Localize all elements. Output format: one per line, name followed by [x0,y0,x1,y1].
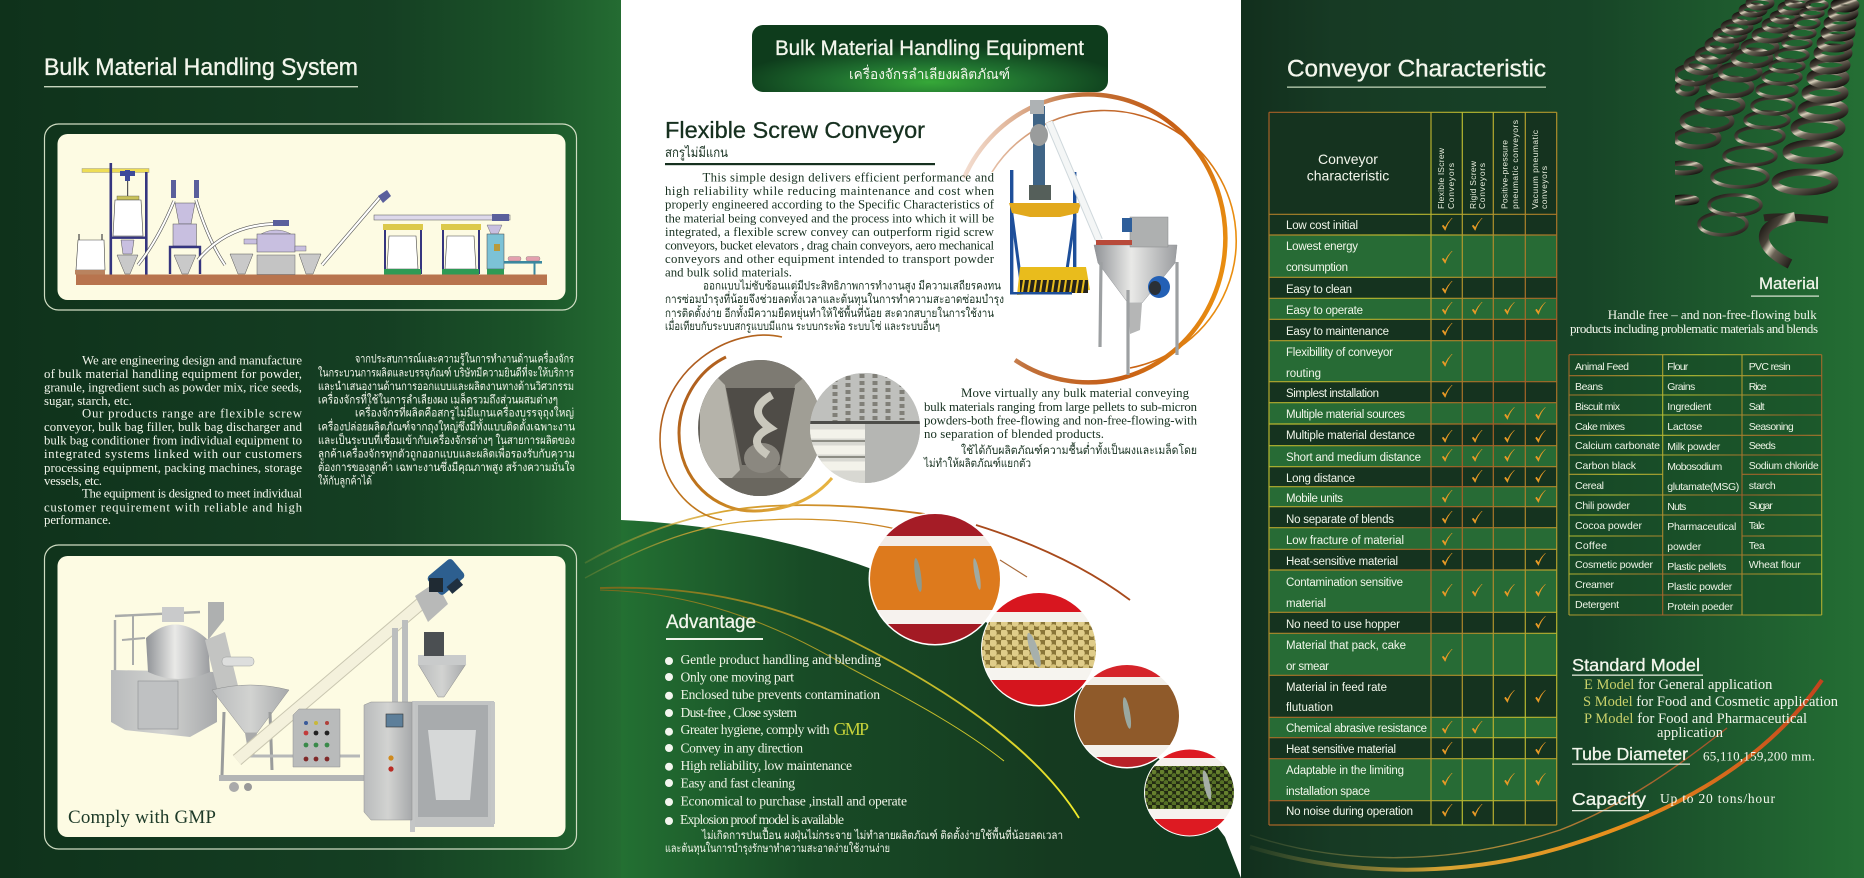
table header: Conveyors [1446,163,1456,209]
row: mobile units: Mobile units [1286,493,1343,505]
photo: flexible screw conveyor with bag unloader and hopper [1009,100,1177,375]
row: multiple material destance [1269,424,1557,446]
row: long distance [1269,467,1557,487]
diagram: bulk bag unloading frame [75,163,149,274]
text block: thai material range: ใช้ได้กับผลิตภัณฑ์ความชื้นต่ำทั้งเป็นผงและเมล็ดโดย [961,442,1197,457]
row: easy to maintenance: Easy to maintenance [1286,326,1389,338]
column: A to D materials: Beans [1575,381,1603,393]
heading: material: Material [1759,274,1819,293]
section: capacity: Capacity [1572,789,1646,809]
list: advantages: Economical to purchase ,install and operate [680,794,907,809]
text block: thai company description: ในกระบวนการผลิตและบรรจุภัณฑ์ บริษัทมีความยินดีที่จะให้บริการ [318,364,574,379]
row: no noise during operation [1269,801,1557,825]
row: no separate of blends [1269,507,1557,528]
heading: conveyor characteristic: Conveyor Characteristic [1287,56,1546,83]
column: P to W materials: Sugar [1749,500,1773,512]
text block: english company description: bulk bag conditioner from individual equipment to [44,434,302,448]
text block: english company description: The equipment is designed to meet individual [82,487,302,501]
text block: thai conveyor description: การติดตั้งง่าย อีกทั้งมีความยืดหยุ่นทำให้ใช้พื้นที่น้อย สะดวกสบายในการใช้งาน [665,305,994,320]
photo: stainless hopper [1094,217,1177,375]
row: lowest energy consumption: consumption [1286,262,1348,274]
text block: english conveyor description: This simple design delivers efficient performance and [702,171,995,185]
heading: flexible screw conveyor: Flexible Screw Conveyor [665,117,925,143]
column: P to W materials: Wheat flour [1749,559,1801,571]
text block: english company description: processing equipment, packing machines, storage [44,461,302,475]
list: advantages: High reliability, low maintenance [680,758,852,773]
column: F to P materials: Milk powder [1667,441,1721,453]
text block: english material range [924,386,1198,441]
row: multiple material destance: Multiple material destance [1286,430,1415,442]
text block: english company description: We are engineering design and manufacture [82,353,302,367]
photo circle: yellow beans [980,592,1098,708]
text block: thai advantages: และต้นทุนในการบำรุงรักษาทำความสะอาดง่ายใช้งานง่าย [665,842,890,855]
column: P to W materials: Salt [1749,401,1765,413]
text block: thai company description: เครื่องปล่อยผลิตภัณฑ์จากถุงใหญ่ซึ่งมีทั้งแบบติดตั้งเฉพาะงาน [318,418,575,433]
column: P to W materials: Tea [1749,540,1765,552]
table: conveyor characteristic comparison [1269,112,1557,825]
column: F to P materials [1667,361,1739,613]
row: flexibility of conveyor routing: routing [1286,368,1321,380]
row: flexibility of conveyor routing: Flexibillity of conveyor [1286,347,1393,359]
row: long distance: Long distance [1286,473,1355,485]
diagram: floor [76,274,547,285]
row: chemical abrasive resistance [1269,717,1557,738]
diagram: bag filling stations [374,214,510,274]
table header: Rigid Screw [1468,160,1478,209]
row: contamination sensitive material: Contamination sensitive [1286,577,1403,589]
photo: bag unloader frame [1009,100,1099,295]
column: P to W materials: PVC resin [1749,361,1791,373]
section: capacity [1572,789,1776,811]
row: low fracture of material: Low fracture of material [1286,535,1404,547]
text block: english company description: performance. [44,513,111,527]
row: easy to operate [1269,298,1557,319]
row: contamination sensitive material [1269,570,1557,612]
column: A to D materials [1575,361,1660,611]
text block: english material range: powders-both free-flowing and non-free-flowing-with [924,414,1198,428]
column: F to P materials: Grains [1667,381,1695,393]
coil row C [1699,1,1827,235]
row: easy to maintenance [1269,319,1557,341]
table: materials list [1569,355,1822,615]
decorative gold arcs crossing panels [585,505,1130,818]
table header: characteristic [1307,168,1389,184]
column: F to P materials: Lactose [1667,421,1702,433]
row: easy to clean [1269,277,1557,298]
text block: material intro: Handle free – and non-free-flowing bulk [1608,307,1817,322]
text block: english company description: Our products range are flexible screw [82,406,303,420]
column: A to D materials: Biscuit mix [1575,401,1621,413]
table header: conveyors [1539,166,1549,209]
text block: english conveyor description: the material being conveyed and the process into which it will be [665,211,994,225]
coil row D [1764,1,1856,264]
text block: english company description: of bulk material handling equipment for powder, [44,367,302,381]
text block: thai company description: ต้องการของลูกค้า เฉพาะงานซึ่งมีคุณภาพสูง สร้างความมั่นใจ [318,459,575,474]
column: F to P materials: Mobosodium [1667,461,1723,473]
column: F to P materials: Protein poeder [1667,601,1734,613]
diagram: sifter station [198,190,391,274]
text block: english conveyor description: and bulk solid materials. [665,265,792,279]
photo circle: brown powder [1074,663,1180,769]
decorative sweeping arcs, right panel [1250,680,1822,870]
heading: flexible screw conveyor: สกรูไม่มีแกน [665,145,728,161]
section: standard model: S Model for Food and Cosmetic application [1583,694,1839,710]
photo circle: orange powder [868,512,1002,646]
row: no separate of blends: No separate of blends [1286,514,1394,526]
text block: english conveyor description: conveyors and other equipment intended to transport powder [665,252,995,266]
column: P to W materials: Seeds [1749,440,1776,452]
row: material that pack, cake or smear [1269,633,1557,675]
column: F to P materials: powder [1667,541,1702,553]
column: A to D materials: Cereal [1575,480,1604,492]
row: mobile units [1269,487,1557,507]
column: P to W materials: starch [1749,480,1776,492]
title box: bulk material handling equipment: Bulk Material Handling Equipment [775,37,1084,60]
table header: Vacuum pneumatic [1530,129,1540,209]
diagram: mixer station [138,180,225,274]
left panel background [0,0,622,878]
row: heat sensitive material: Heat sensitive material [1286,744,1396,756]
heading: bulk material handling system: Bulk Material Handling System [44,54,358,81]
text block: thai conveyor description: เมื่อเทียบกับระบบสกรูแบบมีแกน ระบบกระพ้อ ระบบโซ่ และระบบอื่นๆ [665,318,940,333]
column: P to W materials [1749,361,1819,571]
row: material that pack, cake or smear: or smear [1286,661,1329,673]
heading: flexible screw conveyor [665,117,935,165]
text block: english conveyor description [665,171,995,279]
row: heat sensitive material [1269,738,1557,759]
photo circle: green beans [1144,748,1236,837]
machine: feed hopper [212,685,364,792]
column: A to D materials: Calcium carbonate [1575,440,1660,452]
column: F to P materials: glutamate(MSG) [1667,481,1739,493]
column: P to W materials: Talc [1749,520,1765,532]
list: advantages: Gentle product handling and blending [680,652,881,667]
text block: thai company description: และเป็นระบบที่เชื่อมเข้ากับเครื่องจักรต่างๆ ในสายการผลิตของ [318,432,575,447]
row: adaptable in the limiting installation space: installation space [1286,786,1370,798]
text block: material intro [1570,307,1818,336]
row: multiple material sources [1269,403,1557,424]
list: advantages: Convey in any direction [680,741,803,756]
swirl arcs around lower photos [660,335,832,520]
text block: english company description: granule, ingredient such as powder mix, rice seeds, [44,380,302,394]
row: no need to use hopper [1269,612,1557,633]
row: low cost initial [1269,214,1557,235]
column: F to P materials: Flour [1667,361,1689,373]
photo: screw inside hopper [698,360,817,496]
row: contamination sensitive material: material [1286,598,1326,610]
row: multiple material sources: Multiple material sources [1286,409,1405,421]
table header: pneumatic conveyors [1510,120,1520,209]
text block: thai advantages: ไม่เกิดการปนเปื้อน ผงฝุ่นไม่กระจาย ไม่ทำลายผลิตภัณฑ์ ติดตั้งง่ายใช้พื้นที่น้อยลดเวลา [701,827,1063,842]
text block: thai company description: เครื่องจักรที่ผลิตคือสกรูไม่มีแกนเครื่องบรรจุถุงใหญ่ [355,405,574,420]
row: flexibility of conveyor routing [1269,341,1557,382]
section: capacity: Up to 20 tons/hour [1660,791,1776,806]
coil row A [1675,0,1772,94]
text block: thai conveyor description: การซ่อมบำรุงที่น้อยจึงช่วยลดทั้งเวลาและต้นทุนในการทำความสะอาดซ่อมบำรุง [665,291,1004,306]
section: tube diameter: 65,110,159,200 mm. [1703,749,1815,764]
text block: thai company description: และนำเสนองานด้านการออกแบบและผลิตงานทางด้านวิศวกรรม [318,380,574,393]
section: standard model: E Model for General application [1584,677,1773,693]
column: A to D materials: Animal Feed [1575,361,1629,373]
row: no need to use hopper: No need to use hopper [1286,619,1400,631]
row: low fracture of material [1269,528,1557,549]
list: advantages [665,652,907,827]
photo: flexible screw spirals and tubes [810,373,920,483]
text block: english conveyor description: high reliability while reducing maintenance and cost when [665,184,995,198]
table header: Flexible lScrew [1436,147,1446,209]
row: short and medium distance: Short and medium distance [1286,452,1421,464]
row: short and medium distance [1269,446,1557,467]
row: chemical abrasive resistance: Chemical abrasive resistance [1286,723,1427,735]
column: A to D materials: Carbon black [1575,460,1637,472]
title box: bulk material handling equipment: เครื่องจักรลำเลียงผลิตภัณฑ์ [849,65,1010,82]
column: F to P materials: Plastic powder [1667,581,1733,593]
column: F to P materials: Pharmaceutical [1667,521,1736,533]
table header: Conveyors [1477,163,1487,209]
machine: high shear mixer [111,602,254,737]
text block: thai advantages [665,827,1063,855]
column: A to D materials: Cosmetic powder [1575,559,1654,571]
row: easy to clean: Easy to clean [1286,284,1352,296]
text block: english company description: vessels, etc. [44,474,102,488]
column: F to P materials: Ingredient [1667,401,1711,413]
machine: inclined screw conveyor [237,558,469,760]
orange arcs around conveyor photo [964,94,1236,382]
text block: thai company description: ให้กับลูกค้าได้ [318,474,372,487]
text block: thai company description [318,351,575,487]
panel: comply with GMP machinery [44,545,576,849]
row: adaptable in the limiting installation space: Adaptable in the limiting [1286,765,1404,777]
text block: english conveyor description: conveyors, bucket elevators , drag chain conveyors, aero mechanical [665,238,994,252]
text block: thai conveyor description [665,280,1004,333]
coil row B [1667,0,1809,203]
row: material in feed rate flutuation: Material in feed rate [1286,682,1387,694]
text block: english company description: customer requirement with reliable and high [44,500,303,514]
list: advantages: Greater hygiene, comply with [680,722,830,737]
heading: advantage: Advantage [666,612,756,633]
text block: english material range: bulk materials ranging from large pellets to sub-micron [924,400,1198,414]
text block: english company description: sugar, starch, etc. [44,394,132,408]
text block: english company description: conveyor, bulk bag filler, bulk bag discharger and [44,420,303,434]
image: flexible screw coils [1667,0,1856,264]
text block: material intro: products including problematic materials and blends [1570,321,1818,336]
diagram: packing unit and outfeed table [487,225,542,274]
text block: english company description: integrated systems linked with our customers [44,447,302,461]
list: advantages: Enclosed tube prevents contamination [680,687,880,702]
column: A to D materials: Cocoa powder [1575,520,1642,532]
row: no noise during operation: No noise during operation [1286,806,1413,818]
text block: thai conveyor description: ออกแบบไม่ซับซ้อนแต่มีประสิทธิภาพการทำงานสูง มีความเสถียรคงทน [703,280,1001,292]
list: advantages: Easy and fast cleaning [680,776,795,791]
column: A to D materials: Detergent [1575,599,1619,611]
column: A to D materials: Chili powder [1575,500,1630,512]
panel: system process diagram [44,124,576,310]
text block: english company description [44,353,303,527]
column: P to W materials: Rice [1749,381,1767,393]
text block: english material range: Move virtually any bulk material conveying [961,386,1190,400]
list: advantages: GMP [834,719,869,739]
table header: Positive-pressure [1500,140,1510,209]
row: heat-sensitive material: Heat-sensitive material [1286,556,1398,568]
row: low cost initial: Low cost initial [1286,220,1358,232]
text block: english conveyor description: integrated, a flexible screw convey can outperform rigid screw [665,225,995,239]
centre green curved area [621,520,1241,878]
section: tube diameter: Tube Diameter [1572,744,1688,764]
text block: english conveyor description: properly engineered according to the Specific Characteristics of [665,198,995,212]
row: lowest energy consumption: Lowest energy [1286,241,1358,253]
centre panel background [621,0,1242,878]
list: advantages: Only one moving part [680,670,794,685]
row: material in feed rate flutuation [1269,675,1557,717]
row: heat-sensitive material [1269,549,1557,570]
text block: thai material range [923,442,1197,470]
text block: english material range: no separation of blended products. [924,427,1104,441]
row: adaptable in the limiting installation space [1269,759,1557,801]
machine: control box [293,709,340,767]
column: A to D materials: Cake mixes [1575,421,1625,433]
column: P to W materials: Sodium chloride [1749,460,1819,472]
row: material that pack, cake or smear: Material that pack, cake [1286,640,1406,652]
row: lowest energy consumption [1269,235,1557,277]
column: F to P materials: Plastic pellets [1667,561,1726,573]
section: standard model [1572,655,1839,741]
section: standard model: application [1657,725,1724,741]
row: simplest installation [1269,382,1557,403]
section: tube diameter [1572,744,1815,765]
row: simplest installation: Simplest installation [1286,388,1379,400]
table header: Conveyor [1318,151,1378,167]
text block: thai material range: ไม่ทำให้ผลิตภัณฑ์แยกตัว [923,456,1031,470]
list: advantages: Dust-free , Close system [680,705,797,720]
title box: bulk material handling equipment [752,25,1108,92]
column: P to W materials: Seasoning [1749,421,1794,433]
text block: thai company description: จากประสบการณ์และความรู้ในการทำงานด้านเครื่องจักร [355,351,574,366]
machine: vertical packaging unit [364,632,495,832]
row: material in feed rate flutuation: flutuation [1286,702,1333,714]
caption: comply with GMP: Comply with GMP [68,807,216,828]
column: A to D materials: Coffee [1575,540,1607,552]
right panel background [1241,0,1864,878]
section: standard model: P Model for Food and Pharmaceutical [1584,711,1807,727]
column: A to D materials: Creamer [1575,579,1614,591]
list: advantages: Explosion proof model is available [680,812,844,827]
table header [1269,112,1557,214]
text block: thai company description: เครื่องจักรที่ใช้ในการลำเลียงผง เมล็ดรวมถึงส่วนผสมต่างๆ [318,392,558,407]
row: easy to operate: Easy to operate [1286,305,1363,317]
column: F to P materials: Nuts [1667,501,1686,513]
section: standard model: Standard Model [1572,655,1700,675]
text block: thai company description: ลูกค้าเครื่องจักรทุกตัวถูกออกแบบและผลิตเพื่อรองรับกับความ [318,446,575,461]
